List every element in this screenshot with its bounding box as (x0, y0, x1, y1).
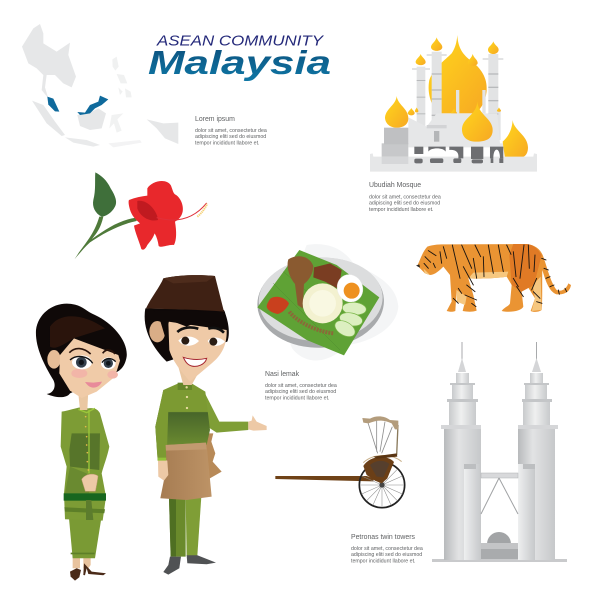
brows (69, 349, 115, 354)
minaret domes (408, 37, 501, 115)
sarong (160, 443, 212, 500)
base wall (370, 153, 537, 172)
podium dome (481, 532, 518, 559)
hat (146, 275, 224, 312)
main dome (429, 35, 487, 113)
egg (333, 270, 367, 306)
text block: Nasi lemak: dolor sit amet, consectetur dea (265, 383, 337, 389)
face (59, 338, 120, 398)
illustration: trishaw (275, 416, 405, 508)
title (148, 32, 331, 81)
ear (47, 350, 61, 369)
icon: hibiscus flower (75, 172, 207, 259)
text block: Ubudiah Mosque: dolor sit amet, consectetur dea (369, 194, 441, 200)
illustration: Petronas twin towers (432, 342, 567, 562)
hair (36, 304, 127, 397)
right tower (518, 342, 558, 560)
eyes (72, 355, 92, 369)
legs (169, 497, 186, 557)
text block: Lorem ipsum: tempor incididunt llabore et. (195, 140, 260, 146)
text block: Lorem ipsum: dolor sit amet, consectetur dea (195, 128, 267, 134)
text block: Ubudiah Mosque: Ubudiah Mosque (369, 182, 421, 189)
text block: Nasi lemak: adipiscing eliti sed do eiusmod (265, 389, 336, 395)
blouse (61, 407, 109, 521)
shirt (155, 383, 210, 460)
base line (432, 559, 567, 562)
anchovies (289, 312, 333, 333)
neck (178, 367, 200, 385)
smile (183, 357, 207, 366)
hair (145, 308, 229, 362)
text block: Petronas twin towers: dolor sit amet, consectetur dea (351, 546, 423, 552)
face (168, 322, 227, 382)
arches (414, 147, 503, 163)
text block: Ubudiah Mosque: tempor incididunt llabore et. (369, 207, 434, 213)
skirt (69, 518, 101, 558)
right dome (503, 120, 528, 158)
canopy (362, 416, 398, 429)
arm and hand (205, 393, 248, 433)
sambal (267, 297, 289, 314)
text block: Nasi lemak (265, 371, 337, 402)
hand (158, 461, 168, 481)
brows (177, 327, 224, 333)
text block: Petronas twin towers: Petronas twin towers (351, 534, 416, 541)
central building (408, 113, 509, 147)
title line: Malaysia: Malaysia (148, 44, 331, 81)
lips (85, 382, 102, 388)
illustration: nasi lemak plate (255, 244, 398, 360)
seat body (363, 457, 394, 483)
text block: Petronas twin towers (351, 534, 423, 564)
text block: Nasi lemak: tempor incididunt llabore et. (265, 396, 330, 402)
shadow (289, 244, 398, 360)
waist sash back (205, 433, 222, 479)
banana leaf (257, 250, 379, 355)
left dome with grey base (382, 143, 408, 158)
illustration: Ubudiah Mosque (370, 35, 537, 172)
hands (82, 474, 98, 491)
legs and shoes (73, 557, 91, 568)
rice (303, 283, 343, 323)
illustration: tiger (416, 244, 571, 312)
text block: Petronas twin towers: tempor incididunt llabore et. (351, 558, 416, 564)
shoes (163, 557, 181, 575)
illustration: man in baju melayu (145, 275, 267, 575)
canopy struts (368, 420, 392, 453)
title line: ASEAN COMMUNITY: ASEAN COMMUNITY (156, 32, 324, 50)
cucumber slices (332, 301, 367, 340)
chicken (288, 256, 313, 308)
ear (149, 321, 165, 342)
rendang (313, 263, 342, 288)
hair fringe (153, 310, 226, 337)
center dome (462, 102, 493, 142)
illustration: woman in baju kurung (36, 304, 127, 581)
text block: Nasi lemak: Nasi lemak (265, 371, 300, 378)
neck (78, 390, 88, 410)
text block: Lorem ipsum: Lorem ipsum (195, 116, 235, 123)
text block: Ubudiah Mosque (369, 182, 441, 213)
shaft (275, 476, 374, 481)
petals (129, 181, 183, 250)
eyes (178, 336, 199, 346)
text block: Lorem ipsum: adipiscing eliti sed do eiusmod (195, 134, 266, 140)
text block: Petronas twin towers: adipiscing eliti sed do eiusmod (351, 552, 422, 558)
text block: Lorem ipsum (195, 116, 267, 146)
left tower (441, 342, 481, 560)
text block: Ubudiah Mosque: adipiscing eliti sed do eiusmod (369, 200, 440, 206)
skybridge (481, 473, 518, 514)
wheel (359, 462, 405, 508)
plate (255, 254, 386, 351)
map of ASEAN with Malaysia highlighted (22, 24, 178, 147)
minarets (412, 52, 503, 144)
